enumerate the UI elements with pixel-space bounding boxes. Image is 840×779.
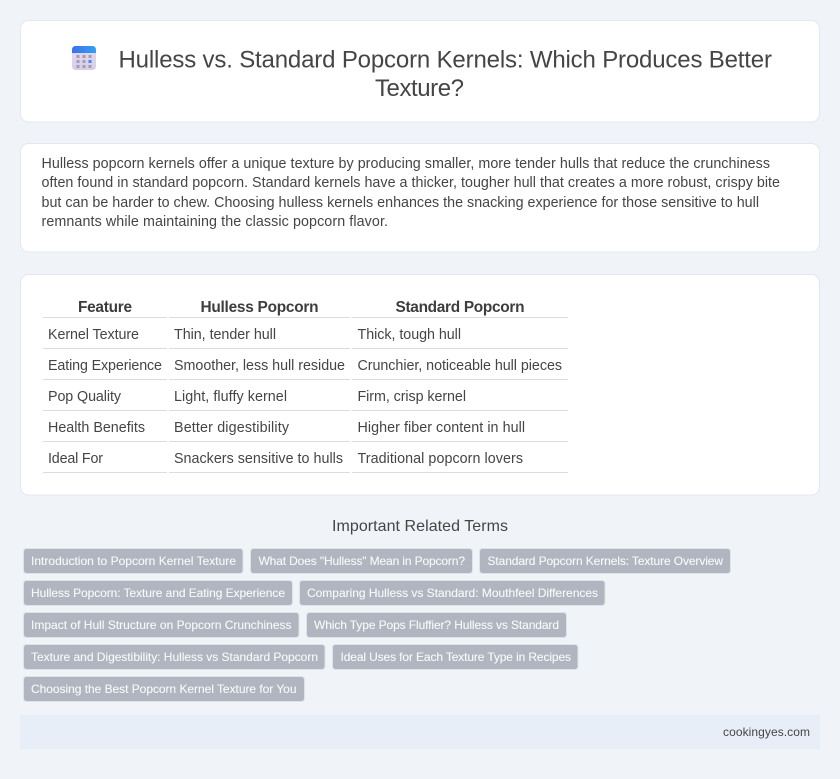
icon: calendar — [72, 46, 96, 70]
tag: mouthfeel: Comparing Hulless vs Standard: Mouthfeel Differences — [307, 586, 598, 600]
row: kernel texture — [43, 327, 568, 349]
heading: important related terms: Important Related Terms — [332, 518, 508, 535]
footer — [20, 715, 820, 749]
tag: choosing — [24, 676, 304, 702]
panel: comparison table — [20, 274, 820, 495]
row: health benefits: Health Benefits — [48, 420, 145, 436]
related term tags — [24, 548, 730, 702]
row: kernel texture: Thick, tough hull — [358, 327, 461, 343]
tag: hull structure: Impact of Hull Structure on Popcorn Crunchiness — [31, 618, 292, 632]
intro paragraph: but can be harder to chew. Choosing hulless kernels enhances the snacking experience for those sensitive to hull — [42, 195, 759, 211]
tag: what does hulless mean — [250, 548, 472, 574]
intro paragraph: often found in standard popcorn. Standard kernels have a thicker, tougher hull that creates a more robust, crispy bite — [42, 175, 780, 191]
tag: ideal uses: Ideal Uses for Each Texture Type in Recipes — [340, 650, 571, 664]
table header: Feature — [78, 299, 132, 316]
tag: what does hulless mean: What Does "Hulless" Mean in Popcorn? — [258, 554, 465, 568]
row: pop quality: Light, fluffy kernel — [174, 389, 287, 405]
title: Texture? — [375, 75, 464, 102]
table header: Hulless Popcorn — [200, 299, 318, 316]
row: ideal for: Snackers sensitive to hulls — [174, 451, 343, 467]
row: health benefits: Higher fiber content in hull — [358, 420, 525, 436]
table header — [43, 299, 568, 318]
row: health benefits: Better digestibility — [174, 420, 290, 436]
tag: hulless texture — [24, 580, 292, 606]
row: ideal for: Traditional popcorn lovers — [358, 451, 523, 467]
tag: standard overview — [480, 548, 730, 574]
row: kernel texture: Thin, tender hull — [174, 327, 276, 343]
table header: Standard Popcorn — [396, 299, 524, 316]
tag: digestibility: Texture and Digestibility: Hulless vs Standard Popcorn — [31, 650, 318, 664]
row: pop quality: Pop Quality — [48, 389, 122, 405]
tag: hulless texture: Hulless Popcorn: Texture and Eating Experience — [31, 586, 285, 600]
tag: standard overview: Standard Popcorn Kernels: Texture Overview — [488, 554, 723, 568]
row: pop quality: Firm, crisp kernel — [358, 389, 466, 405]
panel: introduction — [20, 144, 820, 252]
intro paragraph: Hulless popcorn kernels offer a unique texture by producing smaller, more tender hulls that reduce the crunchiness — [42, 156, 770, 172]
intro paragraph: remnants while maintaining the classic popcorn flavor. — [42, 214, 388, 230]
row: kernel texture: Kernel Texture — [48, 327, 139, 343]
tag: digestibility — [24, 644, 325, 670]
row: eating experience: Smoother, less hull residue — [174, 358, 345, 374]
title panel — [20, 20, 820, 122]
row: pop quality — [43, 389, 568, 411]
tag: mouthfeel — [300, 580, 605, 606]
tag: fluffier — [306, 612, 566, 638]
tag: choosing: Choosing the Best Popcorn Kernel Texture for You — [31, 682, 296, 696]
row: eating experience: Eating Experience — [48, 358, 162, 374]
title — [118, 46, 772, 102]
tag: hull structure — [24, 612, 299, 638]
title: Hulless vs. Standard Popcorn Kernels: Which Produces Better — [118, 46, 772, 74]
tag: ideal uses — [332, 644, 578, 670]
row: eating experience: Crunchier, noticeable hull pieces — [358, 358, 562, 374]
row: ideal for: Ideal For — [48, 451, 103, 467]
row: eating experience — [43, 358, 568, 380]
tag: introduction: Introduction to Popcorn Kernel Texture — [31, 554, 236, 568]
row: ideal for — [43, 451, 568, 473]
tag: introduction — [24, 548, 243, 574]
footer: cookingyes.com — [723, 725, 810, 739]
tag: fluffier: Which Type Pops Fluffier? Hulless vs Standard — [314, 618, 559, 632]
intro paragraph — [42, 156, 780, 230]
row: health benefits — [43, 420, 568, 442]
